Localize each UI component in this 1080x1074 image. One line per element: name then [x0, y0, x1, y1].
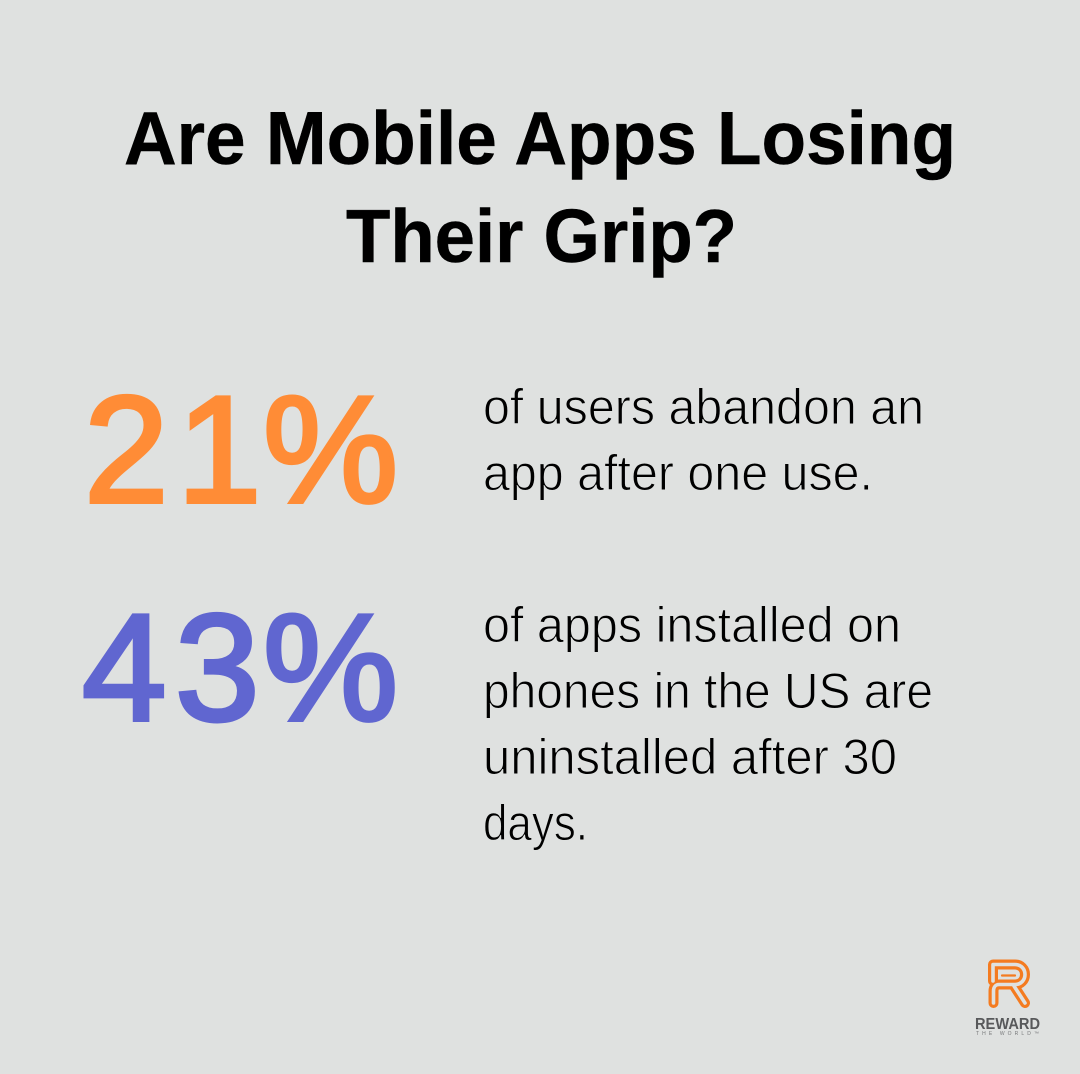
description: 43% of apps: [483, 597, 933, 851]
statistic: 43%: 43%: [82, 583, 398, 753]
wordmark: REWARD: [975, 1016, 1040, 1033]
title: Are Mobile Apps Losing: [124, 97, 956, 181]
logo: Reward the World: [975, 964, 1040, 1037]
tagline: THE WORLD™: [976, 1031, 1039, 1037]
description: 21% of users: of users abandon an: [483, 379, 924, 435]
title: [124, 97, 956, 279]
statistic: 21%: 21%: [84, 365, 398, 535]
icon: R mark: [993, 964, 1025, 1003]
description: 21% of users: [483, 379, 924, 501]
description: 43% of apps: phones in the US are: [483, 663, 933, 719]
description: 43% of apps: of apps installed on: [483, 597, 901, 653]
description: 43% of apps: days.: [483, 795, 588, 851]
description: 43% of apps: uninstalled after 30: [483, 729, 897, 785]
title: Their Grip?: [346, 195, 737, 279]
description: 21% of users: app after one use.: [483, 445, 873, 501]
